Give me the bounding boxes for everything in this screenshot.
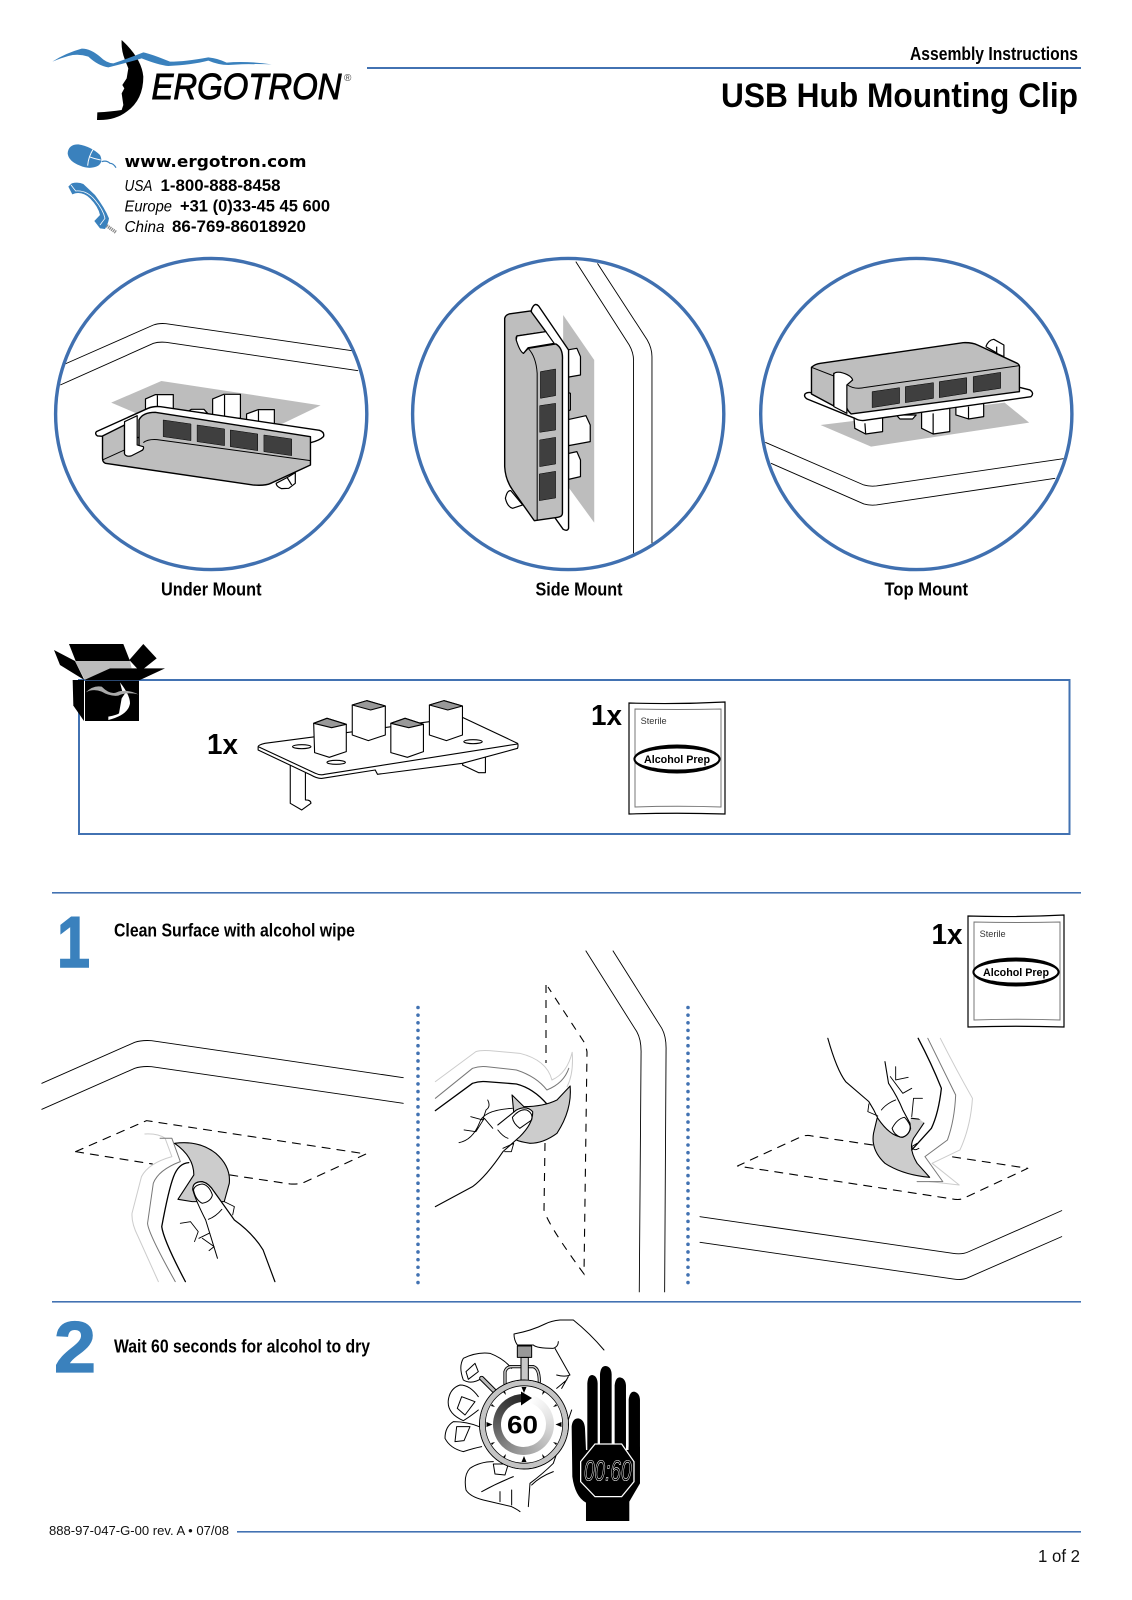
illustration: wiping side mount <box>435 951 666 1292</box>
hub body <box>103 412 310 485</box>
hand holding watch <box>445 1320 604 1512</box>
desk edge lines <box>765 442 1063 505</box>
adhesive plate shadow <box>821 403 1029 447</box>
stopwatch case <box>480 1380 568 1469</box>
section rule 1 <box>52 892 1081 894</box>
wall edge lines <box>576 262 652 553</box>
step 1 heading: Clean Surface with alcohol wipe <box>114 920 355 940</box>
hub edges <box>103 440 310 465</box>
part: alcohol prep packet: Alcohol Prep <box>644 754 710 766</box>
slots <box>293 745 311 749</box>
posts <box>145 394 274 427</box>
count: 1x wipe: 1x <box>591 700 622 732</box>
circle frame <box>413 258 724 570</box>
illustration: stopwatch in hand <box>445 1320 604 1512</box>
part: alcohol prep packet step: Alcohol Prep <box>983 967 1049 979</box>
dotted divider 2 <box>686 1008 690 1288</box>
page number: 1 of 2 <box>1038 1546 1080 1566</box>
step number 1: 1 <box>57 903 90 983</box>
dotted divider 1 <box>416 1008 420 1288</box>
hand <box>435 1050 573 1207</box>
dashed zone <box>544 985 587 1274</box>
posts <box>352 701 385 741</box>
step 2 heading: Wait 60 seconds for alcohol to dry <box>114 1336 371 1356</box>
part: mounting clip <box>258 701 518 810</box>
posts <box>563 348 590 481</box>
clip strip <box>834 372 853 413</box>
wall edges <box>586 951 666 1292</box>
clip tab <box>986 339 1004 357</box>
clip strip <box>516 332 554 353</box>
stopwatch 60: 60 <box>507 1412 538 1440</box>
hub edges <box>528 348 537 521</box>
logo: Ergotron <box>52 40 352 120</box>
stopwatch gradient ring <box>493 1394 555 1456</box>
part: alcohol prep packet step <box>968 915 1064 1027</box>
mounting plate <box>96 407 324 443</box>
contact block: 1-800-888-8458 <box>160 177 280 195</box>
clip legs <box>290 755 485 810</box>
panel: side mount <box>413 258 724 570</box>
hub body <box>811 343 1020 414</box>
USB ports <box>539 369 556 501</box>
label: under mount: Under Mount <box>161 580 262 600</box>
panel: box contents frame <box>79 680 1070 834</box>
hub body <box>505 311 563 521</box>
logo wordmark: ERGOTRON <box>152 66 342 107</box>
count: 1x clip: 1x <box>207 729 238 761</box>
document type: Assembly Instructions <box>910 44 1078 64</box>
clip tab <box>505 491 523 508</box>
contact block: 86-769-86018920 <box>172 218 306 236</box>
adhesive plate shadow <box>111 381 321 425</box>
icon: open box with logo <box>54 644 165 721</box>
phone China: China <box>124 219 165 236</box>
illustration: wiping under mount <box>42 1041 403 1282</box>
panel: under mount <box>56 258 367 570</box>
phone USA: USA <box>124 178 152 195</box>
label: side mount: Side Mount <box>536 580 622 600</box>
website: www.ergotron.com <box>124 152 306 171</box>
section rule 2 <box>52 1301 1081 1303</box>
registered mark: ® <box>344 73 352 84</box>
phone Europe: Europe <box>124 198 172 216</box>
icon: mouse <box>68 144 116 168</box>
posts <box>854 403 984 434</box>
USB ports <box>163 420 292 456</box>
timer readout: 00:60 <box>584 1456 632 1488</box>
panel: top mount <box>761 258 1072 570</box>
hub edges <box>811 366 1019 388</box>
desk edge lines <box>60 323 358 385</box>
label: top mount: Top Mount <box>884 580 968 600</box>
footer rule <box>237 1531 1081 1533</box>
stopwatch arrow <box>521 1392 532 1406</box>
part: alcohol prep packet <box>629 702 725 814</box>
adhesive plate shadow <box>563 315 594 523</box>
main title: USB Hub Mounting Clip <box>721 77 1078 115</box>
illustration: wiping top mount <box>700 1038 1062 1280</box>
icon: telephone <box>68 183 116 232</box>
part: alcohol prep packet step: Sterile <box>980 929 1006 940</box>
USB ports <box>872 372 1001 408</box>
count: 1x wipe step: 1x <box>932 919 962 951</box>
logo mark: face crescent and wave <box>52 40 272 120</box>
clip strip <box>125 416 144 456</box>
header rule <box>367 67 1081 69</box>
part: alcohol prep packet: Sterile <box>641 716 667 727</box>
document number: 888-97-047-G-00 rev. A • 07/08 <box>49 1523 229 1538</box>
mounting plate <box>805 385 1033 421</box>
step number 2: 2 <box>54 1308 96 1388</box>
contact block: +31 (0)33-45 45 600 <box>180 198 330 216</box>
circle frame <box>56 258 367 570</box>
icon: stop hand with timer <box>572 1366 640 1521</box>
contact block <box>68 144 330 236</box>
circle frame <box>761 258 1072 570</box>
clip tab <box>276 473 295 489</box>
mounting plate <box>531 305 569 530</box>
stopwatch ticks <box>486 1387 562 1462</box>
plate <box>258 717 518 778</box>
